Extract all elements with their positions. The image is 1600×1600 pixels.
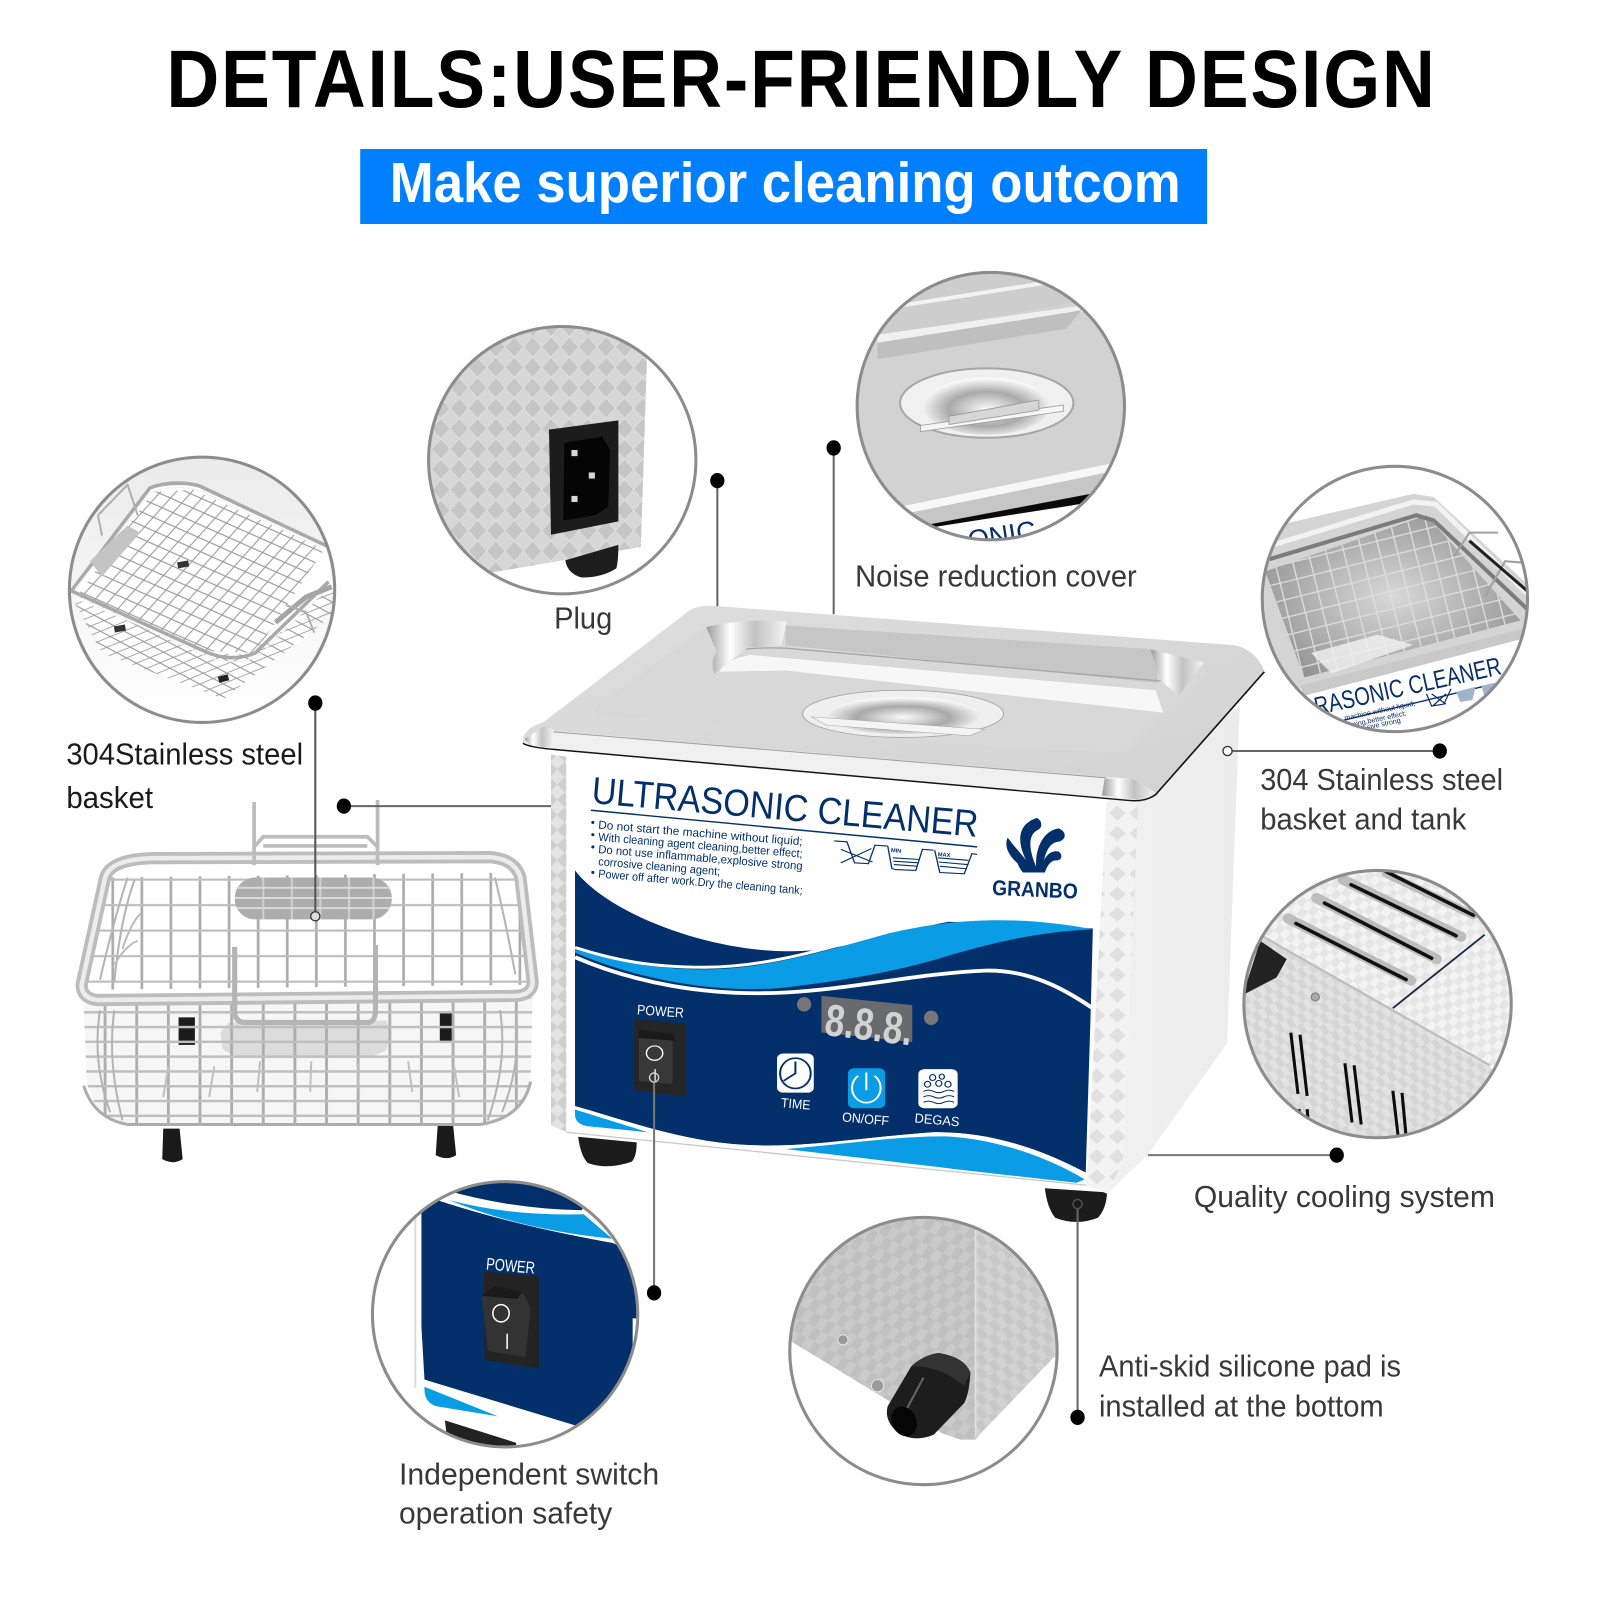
lid channel lines xyxy=(719,648,1161,681)
label: stainless basket: basket xyxy=(66,781,154,815)
back handle xyxy=(254,800,378,865)
leader: power switch xyxy=(647,1073,661,1301)
lid handle xyxy=(803,690,1004,737)
logo petals xyxy=(1006,818,1065,873)
leader: anti-skid pad xyxy=(1070,1199,1085,1425)
front handle xyxy=(235,945,376,1022)
body shapes xyxy=(523,606,1264,1222)
callout: noise reduction cover close-up circle xyxy=(856,270,1126,542)
callout: tank and basket close-up circle: aning,better effect; xyxy=(1348,709,1407,730)
warning text block: Do not use inflammable,explosive strong xyxy=(598,843,803,873)
label: cooling system: Quality cooling system xyxy=(1194,1180,1495,1214)
label: stainless basket xyxy=(66,737,303,815)
label: anti-skid pad xyxy=(1099,1350,1401,1423)
label: stainless basket and tank: basket and tank xyxy=(1260,803,1467,837)
back grill plate xyxy=(235,878,392,919)
label: stainless basket and tank: 304 Stainless steel xyxy=(1260,763,1503,797)
subtitle banner: Make superior cleaning outcom xyxy=(390,151,1181,214)
power switch body xyxy=(634,1019,686,1097)
indicator leds xyxy=(797,997,811,1011)
bottom-right sky xyxy=(786,1136,1085,1183)
time button xyxy=(777,1054,814,1093)
on/off button xyxy=(848,1068,885,1108)
basket rim xyxy=(82,857,533,1000)
callout: plug close-up circle xyxy=(418,316,696,594)
basket feet xyxy=(162,1124,456,1162)
label: independent switch xyxy=(399,1458,659,1530)
time label: TIME xyxy=(780,1095,811,1113)
wash icons xyxy=(834,841,977,874)
heading: ultrasonic cleaner: ULTRASONIC CLEANER xyxy=(590,769,980,845)
leader: basket vertical xyxy=(308,695,322,921)
label: plug: Plug xyxy=(554,602,612,636)
leader: plug xyxy=(710,473,724,606)
icon labels: MAX xyxy=(938,852,951,859)
warning text block: Power off after work.Dry the cleaning tank; xyxy=(598,868,803,897)
basket interior mesh xyxy=(86,872,533,990)
icon labels xyxy=(891,848,951,859)
large wire basket xyxy=(82,800,533,1162)
warning text block xyxy=(591,819,803,897)
degas button xyxy=(918,1069,958,1108)
bottom white band xyxy=(566,1106,1087,1186)
on/off label: ON/OFF xyxy=(842,1109,890,1129)
callout: anti-skid pad close-up circle xyxy=(786,1214,1061,1485)
leader: cooling system xyxy=(1148,1147,1344,1163)
callout: noise reduction cover close-up circle: ONIC xyxy=(965,515,1038,556)
white gap above wave xyxy=(857,915,1094,953)
lid recess xyxy=(594,626,1205,753)
basket rim highlight xyxy=(82,857,533,1000)
panel bottom edge xyxy=(566,1132,1087,1185)
callout: basket close-up circle xyxy=(69,457,337,722)
label: stainless basket: 304Stainless steel xyxy=(66,737,303,771)
basket wall mesh xyxy=(84,998,533,1124)
digital display xyxy=(821,996,912,1042)
callout: power switch close-up circle: POWER xyxy=(485,1254,536,1278)
label: anti-skid pad: installed at the bottom xyxy=(1099,1389,1384,1423)
side checker strip xyxy=(1087,780,1139,1194)
warning text block: Do not start the machine without liquid; xyxy=(598,819,803,848)
lid channel highlight xyxy=(719,655,1163,713)
warning text block: corrosive cleaning agent; xyxy=(598,855,721,878)
bottom-left sky xyxy=(575,1110,648,1132)
leader: noise reduction cover xyxy=(827,440,841,614)
brand name: GRANBO xyxy=(992,876,1078,904)
title: DETAILS:USER-FRIENDLY DESIGN xyxy=(166,34,1437,125)
lid under shadow xyxy=(523,672,1264,801)
ultrasonic cleaner main unit xyxy=(523,606,1264,1222)
callout: cooling system close-up circle xyxy=(1242,868,1513,1140)
label: noise reduction cover: Noise reduction cover xyxy=(855,560,1137,594)
degas label: DEGAS xyxy=(914,1110,960,1129)
lid channel shading xyxy=(786,625,1158,683)
label: anti-skid pad: Anti-skid silicone pad is xyxy=(1099,1350,1401,1384)
power label: POWER xyxy=(637,1002,684,1021)
navy panel xyxy=(575,870,1093,1173)
right foot xyxy=(1045,1188,1107,1222)
top white hairline xyxy=(575,940,857,967)
callout: tank and basket close-up circle: RASONIC CLEANER xyxy=(1312,653,1504,721)
basket wall base with plate and slots xyxy=(84,998,533,1124)
display digits: 8.8.8. xyxy=(822,994,916,1055)
lid front rim xyxy=(524,731,1156,800)
callout: power switch close-up circle xyxy=(370,1180,640,1448)
callout: tank and basket close-up circle xyxy=(1255,466,1541,735)
leader: tank xyxy=(1223,743,1447,759)
white wave stroke xyxy=(575,957,1092,1008)
heading rule xyxy=(591,810,977,847)
label: independent switch: operation safety xyxy=(399,1496,613,1530)
tank right side xyxy=(1087,706,1240,1194)
icon labels: MIN xyxy=(891,848,901,855)
warning text block: With cleaning agent cleaning,better effect; xyxy=(598,831,803,861)
label: stainless basket and tank xyxy=(1260,763,1503,837)
tank left side xyxy=(551,755,567,1132)
front label panel xyxy=(566,756,1106,1184)
chrome corner left xyxy=(706,621,787,674)
lid xyxy=(523,606,1264,800)
chrome corner right xyxy=(1151,649,1204,696)
left foot xyxy=(578,1131,637,1166)
leader: basket horizontal xyxy=(337,798,551,814)
label: independent switch: Independent switch xyxy=(399,1458,659,1492)
callout: tank and basket close-up circle: machine without liquid; xyxy=(1344,700,1416,722)
callout: tank and basket close-up circle: sive strong xyxy=(1366,717,1401,732)
sky wave xyxy=(575,920,1093,989)
